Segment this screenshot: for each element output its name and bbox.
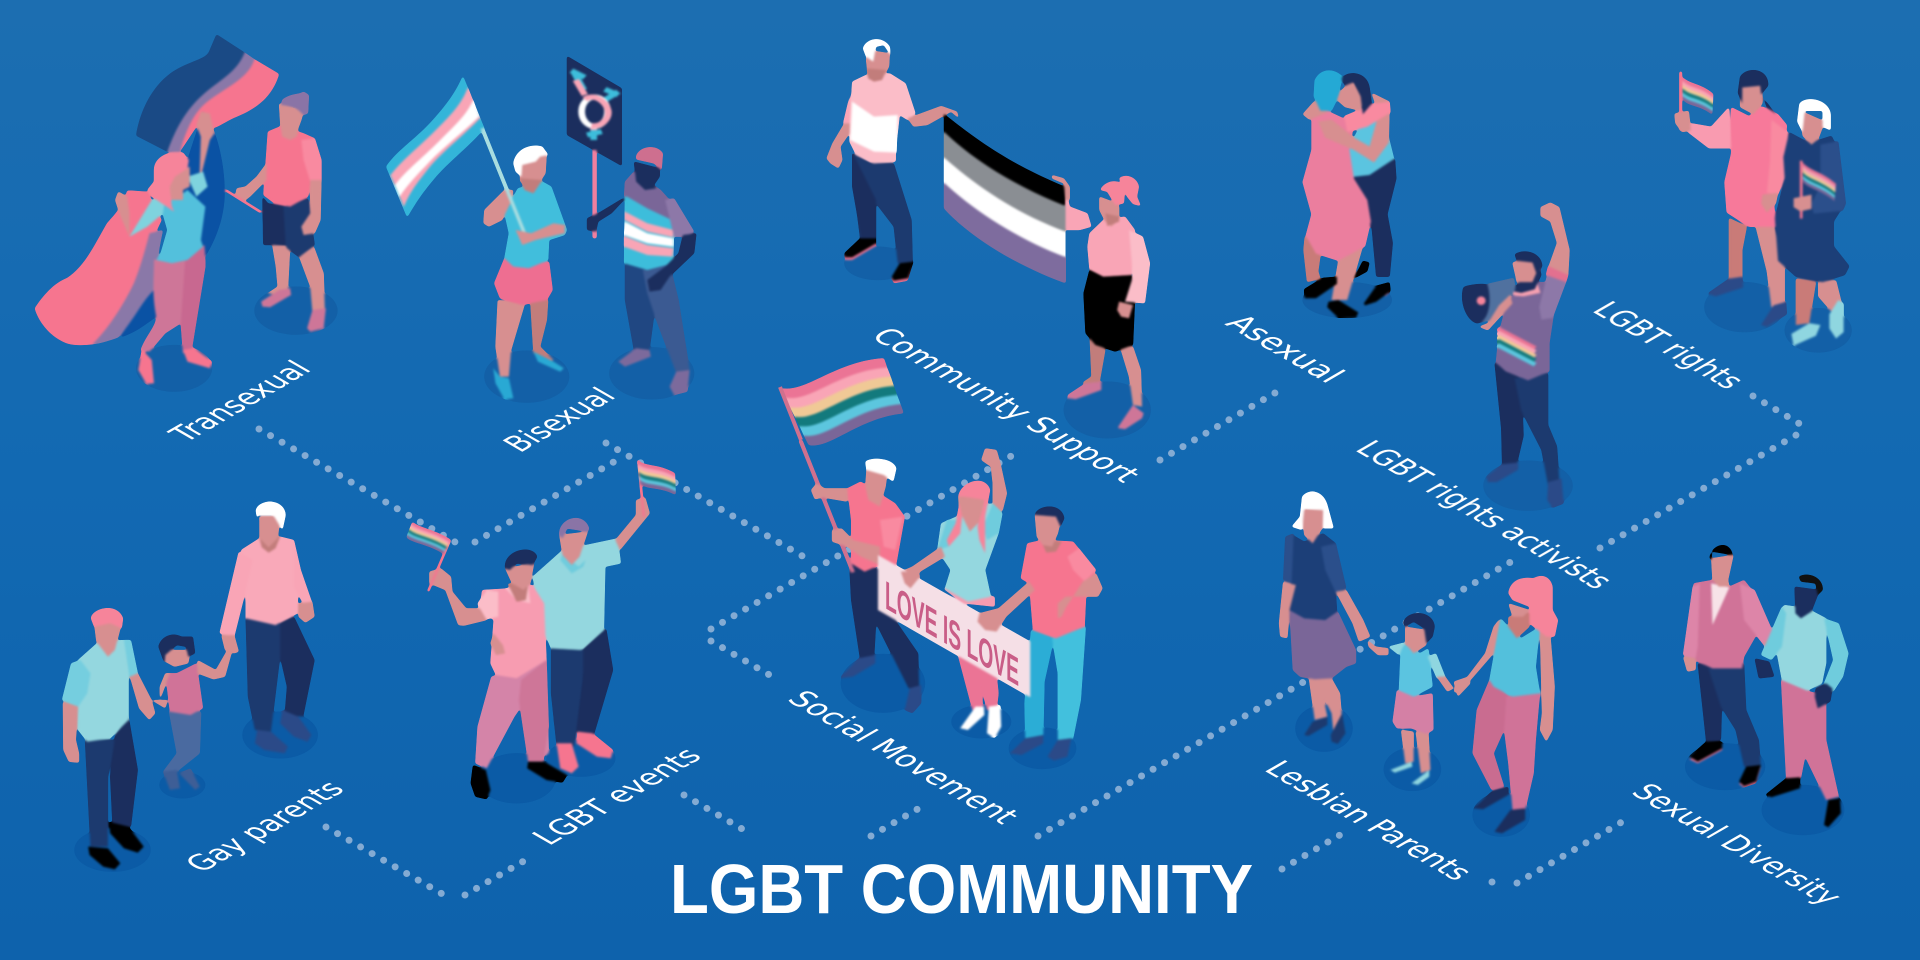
person: man with rainbow flag	[800, 440, 921, 713]
person: child	[152, 635, 232, 790]
panel: sexual diversity figures	[1683, 545, 1848, 835]
panel: social movement figures	[800, 440, 1103, 769]
floor shadows	[74, 712, 318, 872]
text: LOVE IS LOVE	[885, 573, 1019, 696]
label: Community Support: Community Support	[863, 323, 1148, 488]
panel: gay parents figures	[62, 502, 318, 872]
person: father with pink hair	[62, 608, 155, 869]
panel: LGBT events figures	[398, 451, 682, 803]
floor shadows	[844, 247, 1151, 438]
label: Gay parents: Gay parents	[178, 776, 353, 877]
person: father with white hair	[219, 502, 315, 753]
label: Social Movement: Social Movement	[779, 686, 1027, 829]
label: LGBT events: LGBT events	[525, 743, 710, 850]
icon: rainbow flag	[781, 358, 904, 445]
floor shadows	[1685, 743, 1844, 835]
floor shadows	[1303, 282, 1852, 511]
floor shadows	[484, 347, 694, 403]
person: man in mauve jacket	[1683, 545, 1774, 787]
person: man with white hair	[827, 39, 959, 283]
dotted connector lines	[259, 390, 1800, 895]
icon: rainbow flag pole	[780, 387, 801, 440]
banner background	[878, 555, 1030, 697]
label: Bisexual: Bisexual	[496, 383, 624, 457]
floor shadows	[136, 287, 337, 392]
title: LGBT COMMUNITY	[670, 850, 1253, 928]
icon: transgender flag	[386, 76, 484, 217]
person: woman in pink dress with flag	[1674, 68, 1788, 327]
person: woman with flag	[115, 112, 214, 384]
icon: placard with symbol	[567, 56, 622, 238]
hands over banner	[901, 572, 1035, 632]
label: LGBT rights: LGBT rights	[1584, 297, 1752, 394]
person: woman with raised fist	[901, 448, 1007, 738]
icon: waving flag	[35, 34, 279, 345]
person: woman with ponytail	[1052, 175, 1150, 429]
person: mother with white hair	[1279, 492, 1370, 744]
person: man in aqua top	[1755, 575, 1848, 827]
person: man with striped shirt	[587, 147, 696, 395]
panel: community support figures	[781, 39, 1151, 445]
label: Transexual: Transexual	[161, 356, 319, 447]
person: woman with flag	[482, 128, 567, 399]
floor shadows	[841, 654, 1076, 769]
panel: asexual and activist figures	[1303, 68, 1852, 511]
person: older woman in navy dress	[1775, 99, 1849, 346]
label: Sexual Diversity: Sexual Diversity	[1623, 779, 1850, 910]
person: man in pink shirt and cyan trousers	[1010, 507, 1103, 761]
icon: asexual flag	[944, 114, 1066, 283]
person: mother with pink hair	[1454, 576, 1558, 833]
person: man with pink shirt	[225, 92, 326, 332]
label: Asexual: Asexual	[1217, 310, 1352, 388]
panel: bisexual figures	[386, 56, 696, 403]
panel: transexual figures	[35, 34, 337, 392]
person: man in pink shirt	[398, 517, 567, 799]
person: hugging couple	[1303, 70, 1396, 318]
panel: lesbian parents figures	[1279, 492, 1558, 837]
person: activist with megaphone	[1462, 202, 1570, 508]
floor shadows	[1295, 705, 1530, 837]
floor shadows	[478, 740, 615, 803]
label: LGBT rights activists: LGBT rights activists	[1347, 436, 1621, 594]
label: Lesbian Parents: Lesbian Parents	[1256, 756, 1480, 886]
person: child	[1367, 613, 1454, 785]
person: man in aqua shirt	[533, 451, 682, 773]
